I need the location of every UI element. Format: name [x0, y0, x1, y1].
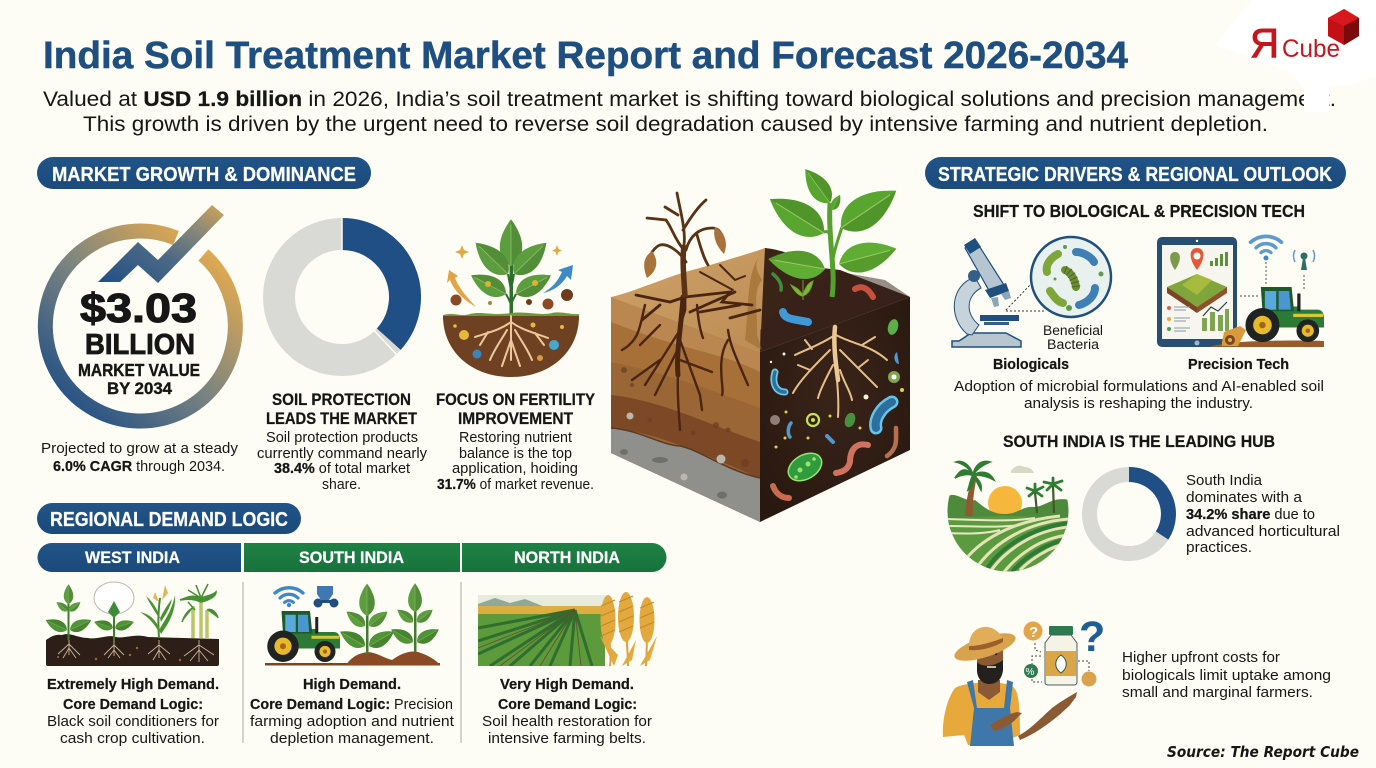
text: adoption: Adoption of microbial formulations and AI-enabled soil — [954, 379, 1324, 395]
text: adoption — [954, 379, 1324, 412]
text: south india demand: High Demand. — [303, 677, 401, 693]
text: soil protection — [257, 390, 428, 493]
text: south india demand: depletion management. — [270, 731, 434, 747]
text: north india demand — [482, 677, 652, 747]
header: north india: NORTH INDIA — [514, 548, 620, 567]
header: north india — [462, 543, 666, 572]
text: cost barrier: Higher upfront costs for — [1122, 650, 1280, 666]
label: precision tech: Precision Tech — [1188, 357, 1289, 373]
header: west india — [38, 543, 241, 572]
subtitle: Valued at USD 1.9 billion in 2026, India’s soil treatment market is shifting toward biological solutions and precision management. — [43, 88, 1336, 111]
icon: beneficial bacteria lens — [1031, 237, 1111, 317]
text: CAGR: 6.0% CAGR through 2034. — [53, 458, 225, 475]
big number — [78, 285, 200, 398]
icon: precision tractor and signals — [1210, 236, 1324, 347]
text: CAGR — [41, 440, 239, 475]
chart: south india donut — [1090, 474, 1168, 554]
illustration: south india landscape — [947, 462, 1069, 575]
badges: % — [1026, 667, 1034, 678]
logo patch — [1215, 0, 1376, 112]
text: north india demand: Very High Demand. — [500, 677, 634, 693]
panel: strategic drivers and regional outlook — [925, 157, 1359, 761]
title: India Soil Treatment Market Report and Forecast 2026-2034 — [43, 35, 1128, 77]
text: north india demand: Core Demand Logic: — [498, 697, 637, 713]
badges: ? — [1079, 613, 1105, 661]
heading pill: market growth: MARKET GROWTH & DOMINANCE — [52, 164, 356, 186]
illustration: farmer with biological product — [943, 613, 1105, 746]
heading pill: regional demand — [37, 503, 301, 534]
text: soil protection: SOIL PROTECTION — [272, 390, 411, 409]
text: west india demand: Core Demand Logic: — [63, 697, 203, 713]
label: beneficial bacteria: Beneficial — [1043, 323, 1103, 338]
cube right face: healthy soil — [760, 272, 910, 522]
text: north india demand: Soil health restoration for — [482, 714, 652, 730]
illustration: west india crops — [43, 582, 219, 666]
text: west india demand: cash crop cultivation. — [60, 731, 205, 747]
text: soil protection: currently command nearly — [257, 446, 428, 462]
text: south india share: advanced horticultural — [1186, 524, 1340, 540]
heading pill: strategic drivers — [925, 157, 1346, 189]
text: fertility improvement — [436, 390, 596, 493]
panel: regional demand logic — [37, 503, 666, 747]
healthy roots — [793, 327, 887, 417]
text: west india demand — [47, 677, 219, 747]
illustration: soil cube degraded vs healthy — [611, 163, 910, 522]
worms — [836, 444, 868, 473]
text: south india share: dominates with a — [1186, 490, 1303, 506]
subtitle — [43, 88, 1336, 136]
illustration: south india tractor and plants — [265, 583, 442, 666]
text: fertility improvement: 31.7% of market revenue. — [437, 477, 594, 493]
subheading: south india hub: SOUTH INDIA IS THE LEADING HUB — [1003, 432, 1275, 451]
text: south india share: practices. — [1186, 540, 1252, 556]
logo: RCube — [1250, 9, 1359, 66]
heading pill: regional demand: REGIONAL DEMAND LOGIC — [50, 509, 288, 531]
text: south india share: South India — [1186, 473, 1263, 489]
logo: RCube: Я — [1250, 20, 1279, 66]
icon: growth arrow — [98, 205, 224, 283]
bacteria — [770, 318, 904, 486]
text: fertility improvement: FOCUS ON FERTILITY — [436, 390, 596, 409]
badges: ? — [1029, 624, 1038, 641]
text: fertility improvement: IMPROVEMENT — [458, 409, 574, 428]
text: fertility improvement: Restoring nutrient — [459, 430, 572, 446]
farmer figure — [943, 627, 1077, 746]
healthy plant — [762, 163, 905, 297]
text: south india demand: farming adoption and nutrient — [250, 714, 454, 730]
text: south india demand: Core Demand Logic: Precision — [250, 697, 453, 713]
gauge: market value ring — [45, 205, 235, 421]
heading pill: strategic drivers: STRATEGIC DRIVERS & REGIONAL OUTLOOK — [938, 164, 1332, 186]
big number: BY 2034 — [107, 380, 173, 398]
header: west india: WEST INDIA — [85, 548, 180, 567]
product bottle — [1045, 626, 1077, 685]
big number: MARKET VALUE — [78, 360, 200, 380]
text: adoption: analysis is reshaping the industry. — [1024, 396, 1253, 412]
text: soil protection: 38.4% of total market — [274, 461, 410, 477]
text: south india share — [1186, 473, 1340, 556]
subtitle: This growth is driven by the urgent need to reverse soil degradation caused by intensive farming and nutrient depletion. — [83, 113, 1268, 136]
text: fertility improvement: application, hoiding — [452, 461, 578, 477]
big number: BILLION — [85, 329, 195, 361]
label: beneficial bacteria: Bacteria — [1047, 337, 1100, 352]
header: south india — [244, 543, 460, 572]
cube left face: dry layers — [611, 297, 760, 522]
text: fertility improvement: balance is the top — [459, 446, 572, 462]
text: west india demand: Black soil conditioners for — [47, 714, 219, 730]
text: west india demand: Extremely High Demand. — [47, 677, 219, 693]
text: cost barrier: biologicals limit uptake among — [1122, 668, 1331, 684]
badges — [1024, 613, 1105, 686]
dry roots and cracks — [622, 297, 748, 430]
cube top: dry cracked soil — [611, 248, 910, 352]
text: soil protection: share. — [322, 477, 361, 493]
text: south india share: 34.2% share due to — [1186, 507, 1315, 523]
header: south india: SOUTH INDIA — [299, 548, 404, 567]
dead tree — [644, 193, 726, 297]
text: cost barrier: small and marginal farmers. — [1122, 685, 1313, 701]
label: biologicals: Biologicals — [993, 357, 1069, 373]
text: north india demand: intensive farming belts. — [488, 731, 646, 747]
chart: soil protection donut — [279, 217, 405, 360]
icon: tablet with soil map — [1157, 237, 1237, 347]
text: cost barrier — [1122, 650, 1331, 701]
callout dotted lines — [1006, 285, 1045, 311]
panel: market growth and dominance — [37, 157, 596, 493]
subheading: shift to biological: SHIFT TO BIOLOGICAL & PRECISION TECH — [973, 201, 1305, 221]
label: beneficial bacteria — [1043, 323, 1103, 352]
illustration: north india field and wheat — [478, 592, 657, 666]
text: soil protection: Soil protection products — [266, 430, 418, 446]
heading pill: market growth — [37, 157, 371, 189]
logo: RCube: Cube — [1282, 35, 1340, 63]
big number: $3.03 — [80, 285, 197, 331]
text: soil protection: LEADS THE MARKET — [266, 409, 418, 428]
text: CAGR: Projected to grow at a steady — [41, 440, 239, 457]
icon: microscope — [952, 238, 1045, 347]
text: south india demand — [250, 677, 454, 747]
icon: fertility plant — [440, 219, 582, 378]
